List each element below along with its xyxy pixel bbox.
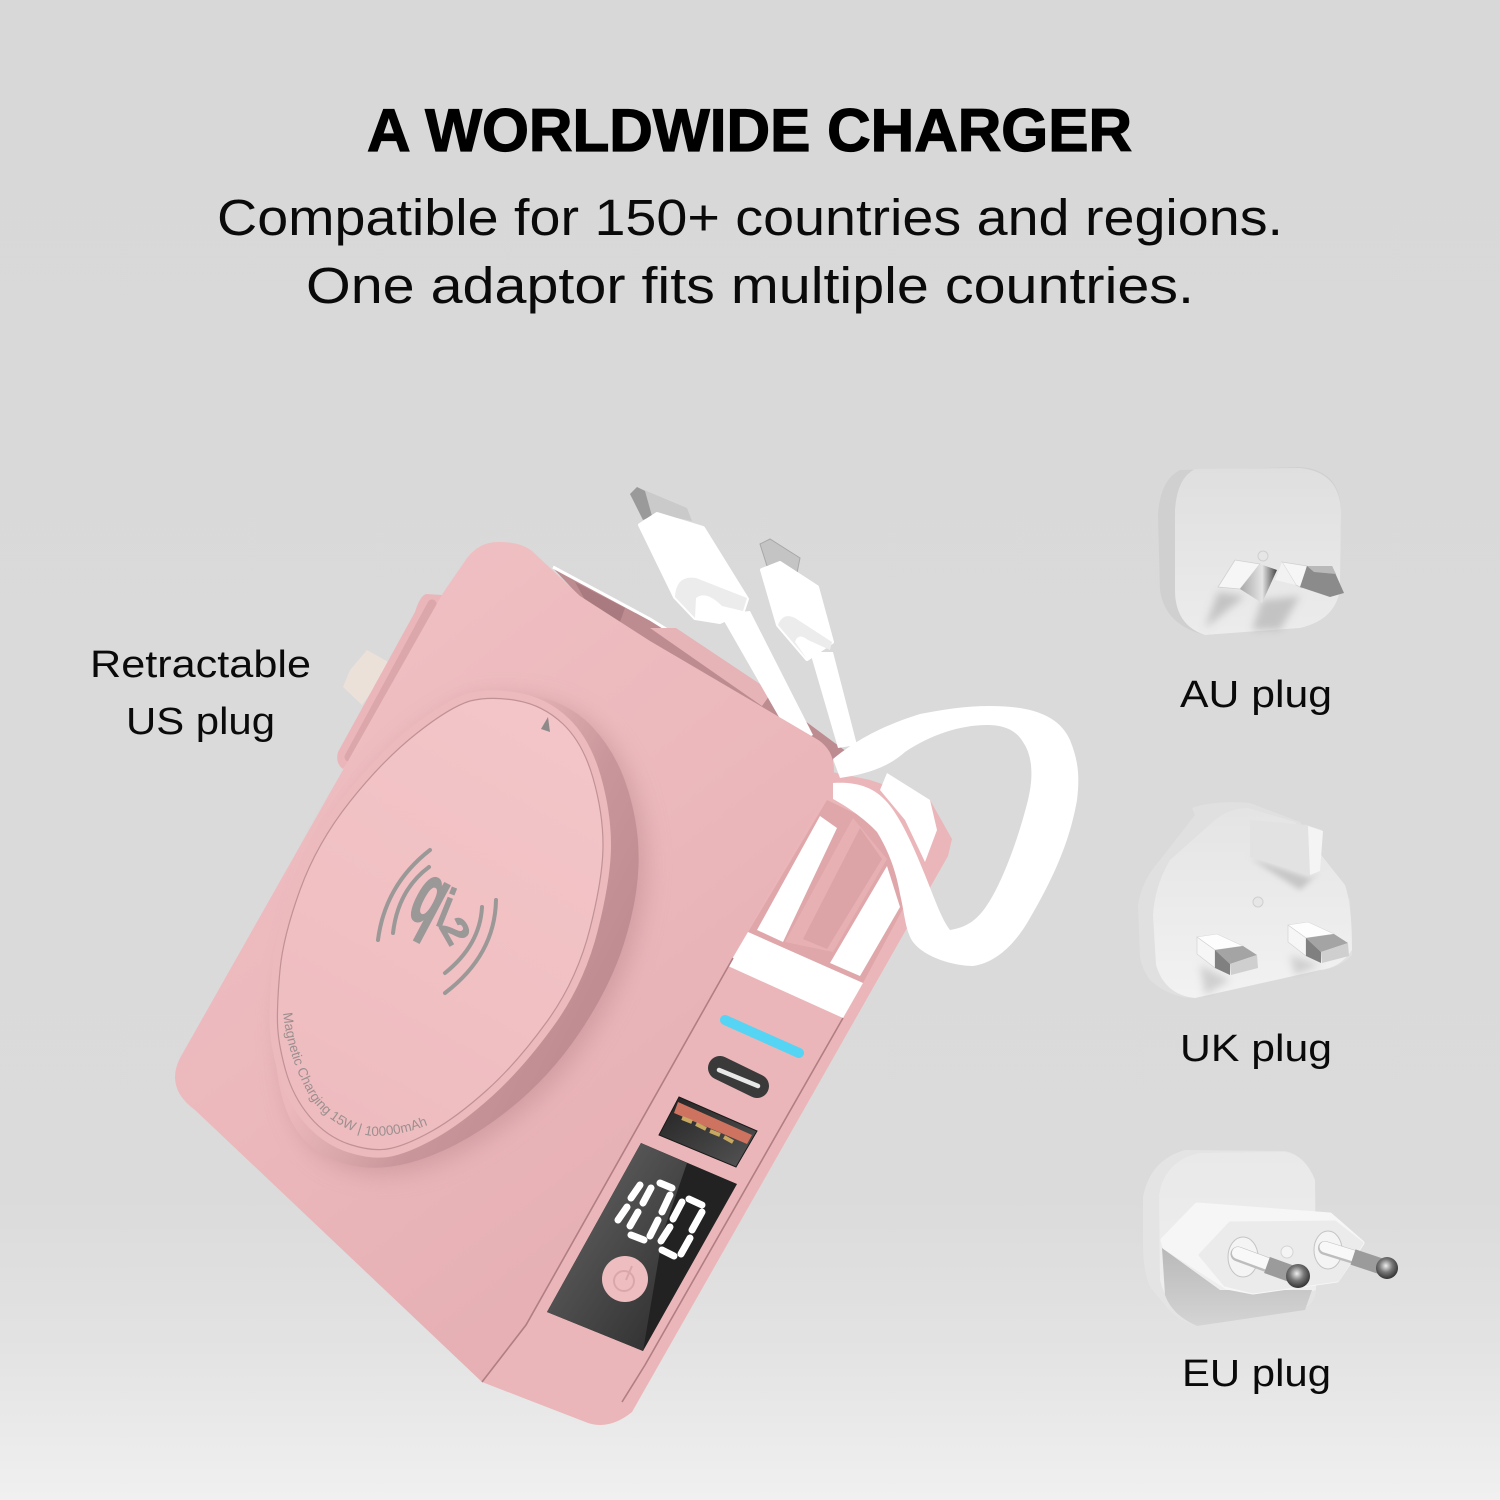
UK plug (1138, 802, 1352, 998)
qi2 logo (378, 844, 496, 993)
qi2 logo: q (397, 844, 468, 945)
UK left pin (1197, 934, 1258, 975)
AU plug (1158, 467, 1344, 635)
EU left pin (1228, 1237, 1310, 1288)
USB-A port (659, 1097, 757, 1167)
label: retractable US plug: Retractable (90, 644, 311, 686)
qi2 logo: i (430, 877, 462, 939)
subtitle text (217, 189, 1283, 314)
EU plug body (1163, 1205, 1362, 1292)
main front face of device (175, 542, 834, 1382)
cable: Lightning (760, 539, 857, 748)
power button (602, 1256, 648, 1302)
retractable US plug prong (337, 594, 460, 769)
EU plug label: EU plug (1182, 1353, 1331, 1395)
UK plug label: UK plug (1180, 1028, 1332, 1070)
UK right pin (1288, 922, 1349, 963)
label: retractable US plug: US plug (126, 701, 275, 743)
magnetic disc: Magnetic Charging 15W | 10000mAh (283, 1012, 427, 1136)
cable compartment (748, 773, 937, 983)
LED indicator (725, 1020, 799, 1053)
AU prongs (1218, 560, 1344, 603)
AU plug label: AU plug (1180, 674, 1332, 716)
white retaining bar (728, 932, 863, 1018)
title: A WORLDWIDE CHARGER (367, 97, 1132, 164)
disc raised rim (272, 692, 639, 1168)
qi2 logo: 2 (432, 911, 478, 951)
side face of device (482, 772, 952, 1425)
white ribbon cable loop (833, 706, 1078, 966)
EU right pin (1314, 1231, 1398, 1279)
subtitle text: Compatible for 150+ countries and regions. (217, 189, 1283, 246)
triangle marker (541, 717, 550, 732)
disc cast shadow (280, 698, 647, 1174)
subtitle text: One adaptor fits multiple countries. (306, 257, 1194, 314)
disc face (277, 698, 603, 1150)
EU plug (1143, 1150, 1398, 1326)
UK earth blade (1250, 820, 1323, 875)
LCD screen (547, 1143, 737, 1351)
USB-C port (719, 1068, 758, 1086)
top compartments of device (553, 567, 847, 765)
disc inner ring (277, 698, 603, 1150)
battery percentage digits (618, 1183, 702, 1256)
front panel seam lines (482, 958, 843, 1402)
disc caption (283, 1013, 428, 1136)
magnetic disc (276, 692, 652, 1178)
power bank product illustration (175, 487, 1078, 1425)
cable: USB-C (630, 487, 813, 745)
label: retractable US plug (90, 644, 311, 743)
